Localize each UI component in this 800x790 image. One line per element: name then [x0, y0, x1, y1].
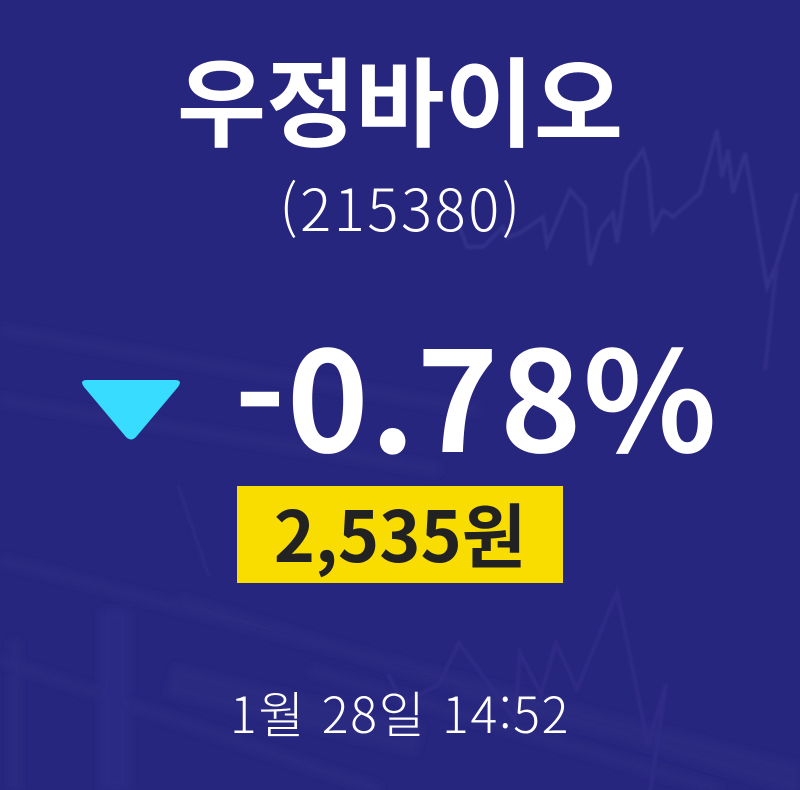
- date and time: 1월 28일 14:52: [230, 676, 570, 748]
- stock code: (215380): [279, 164, 523, 248]
- price badge: [237, 486, 563, 583]
- title: company name: 우정바이오: [177, 26, 623, 167]
- percent change: -0.78%: [234, 292, 718, 493]
- price text: 2,535원: [274, 482, 526, 583]
